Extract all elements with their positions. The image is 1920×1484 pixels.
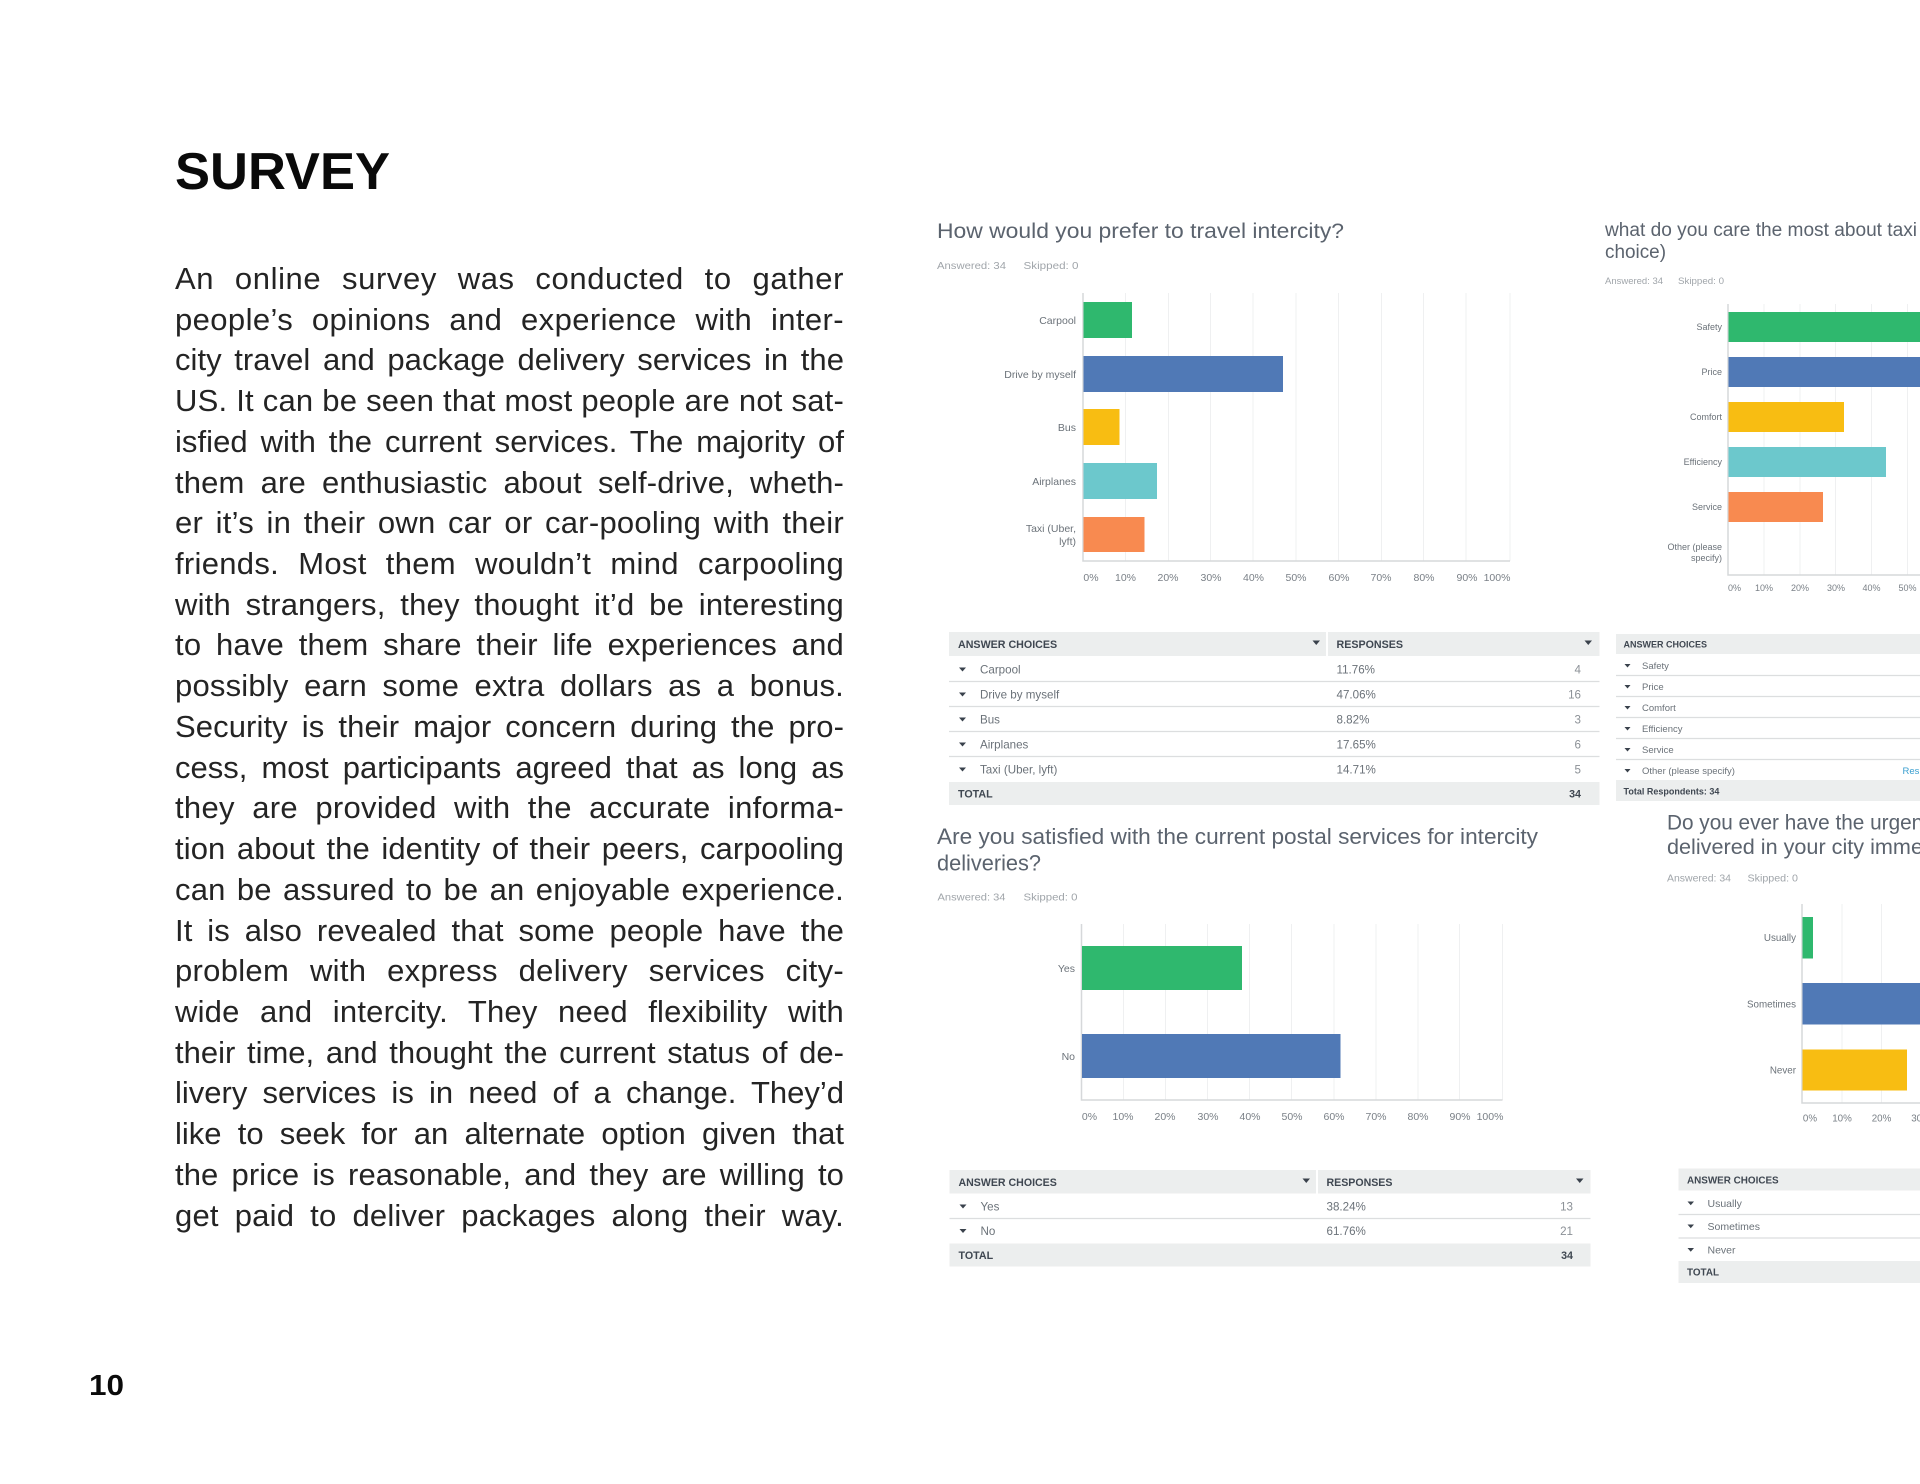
answered and skipped counts bbox=[937, 260, 1079, 272]
table: delivery urgency responses: Never bbox=[1708, 1244, 1736, 1256]
bar chart: postal satisfaction: 60% bbox=[1323, 1111, 1345, 1123]
bar chart: travel preference: 0% bbox=[1083, 572, 1099, 584]
bar chart: taxi priorities: 40% bbox=[1862, 583, 1881, 593]
panel: postal satisfaction survey question bbox=[937, 824, 1590, 1266]
bar chart: postal satisfaction: 0% bbox=[1082, 1111, 1097, 1123]
answered and skipped counts: Skipped: 0 bbox=[1748, 872, 1798, 884]
page number: 10 bbox=[89, 1370, 124, 1402]
table: travel preference responses: 3 bbox=[1575, 714, 1581, 726]
table: travel preference responses: 14.71% bbox=[1336, 764, 1376, 776]
text block: survey summary: to have them share their life experiences and bbox=[175, 627, 844, 662]
bar chart: postal satisfaction: 20% bbox=[1154, 1111, 1176, 1123]
bar chart: taxi priorities: 50% bbox=[1898, 583, 1917, 593]
table: taxi priorities responses: Comfort bbox=[1642, 703, 1676, 714]
table: postal satisfaction responses: RESPONSES bbox=[1326, 1177, 1392, 1189]
text block: survey summary: the price is reasonable, and they are willing to bbox=[175, 1157, 844, 1192]
table: travel preference responses: Taxi (Uber, lyft) bbox=[980, 764, 1057, 776]
bar chart: postal satisfaction: 10% bbox=[1112, 1111, 1134, 1123]
title: SURVEY bbox=[175, 143, 390, 201]
table: taxi priorities responses: Total Respondents: 34 bbox=[1624, 786, 1719, 796]
bar chart: travel preference: Carpool bbox=[1039, 315, 1076, 327]
answered and skipped counts: Answered: 34 bbox=[1605, 276, 1663, 287]
table: delivery urgency responses bbox=[1678, 1168, 1920, 1283]
table: postal satisfaction responses: Yes bbox=[980, 1200, 1000, 1214]
bar chart: travel preference: 60% bbox=[1328, 572, 1350, 584]
text block: survey summary: er it’s in their own car or car-pooling with their bbox=[175, 505, 844, 540]
text block: survey summary: like to seek for an alternate option given that bbox=[175, 1116, 844, 1151]
bar chart: delivery urgency: 0% bbox=[1803, 1114, 1817, 1124]
table: travel preference responses: 5 bbox=[1575, 764, 1581, 776]
bar chart: travel preference: 50% bbox=[1285, 572, 1307, 584]
table: postal satisfaction responses: ANSWER CHOICES bbox=[958, 1177, 1057, 1189]
table: travel preference responses: 8.82% bbox=[1336, 714, 1369, 726]
bar chart: postal satisfaction bbox=[1058, 924, 1503, 1123]
bar chart: travel preference: lyft) bbox=[1059, 536, 1076, 548]
bar chart: postal satisfaction: 50% bbox=[1281, 1111, 1303, 1123]
table: travel preference responses: Airplanes bbox=[980, 738, 1029, 752]
table: travel preference responses: Drive by myself bbox=[980, 688, 1060, 702]
table: taxi priorities responses: Price bbox=[1642, 682, 1664, 693]
bar chart: travel preference: 40% bbox=[1243, 572, 1264, 584]
table: travel preference responses: Carpool bbox=[980, 664, 1021, 676]
table: postal satisfaction responses: 61.76% bbox=[1326, 1225, 1366, 1238]
table: travel preference responses: 47.06% bbox=[1336, 688, 1376, 702]
text block: survey summary: Security is their major concern during the pro- bbox=[175, 709, 844, 744]
table: postal satisfaction responses: 34 bbox=[1561, 1250, 1573, 1262]
text block: survey summary: It is also revealed that some people have the bbox=[175, 912, 844, 948]
answered and skipped counts: Answered: 34 bbox=[1667, 872, 1731, 884]
text block: survey summary: with strangers, they thought it’d be interesting bbox=[175, 587, 844, 622]
table: travel preference responses bbox=[949, 632, 1600, 805]
panel: travel preference survey question bbox=[937, 220, 1600, 805]
table: taxi priorities responses: Service bbox=[1642, 745, 1674, 756]
text block: survey summary: An online survey was conducted to gather bbox=[175, 261, 844, 296]
bar chart: taxi priorities: 20% bbox=[1791, 583, 1809, 593]
text block: survey summary: wide and intercity. They need flexibility with bbox=[175, 994, 844, 1029]
bar chart: delivery urgency bbox=[1747, 904, 1920, 1124]
bar chart: travel preference: Airplanes bbox=[1032, 476, 1076, 488]
bar chart: delivery urgency: Usually bbox=[1764, 933, 1796, 944]
text block: survey summary: US. It can be seen that most people are not sat- bbox=[175, 383, 844, 418]
table: travel preference responses: 16 bbox=[1568, 688, 1581, 702]
table: delivery urgency responses: Usually bbox=[1708, 1198, 1743, 1210]
bar chart: taxi priorities: Comfort bbox=[1690, 412, 1722, 422]
bar chart: travel preference: 70% bbox=[1370, 572, 1392, 584]
text block: survey summary: can be assured to be an enjoyable experience. bbox=[175, 872, 844, 907]
bar chart: taxi priorities: 10% bbox=[1755, 583, 1773, 593]
heading: postal question: Are you satisfied with the current postal services for intercity bbox=[937, 824, 1538, 849]
table: postal satisfaction responses: 38.24% bbox=[1326, 1200, 1366, 1214]
bar chart: taxi priorities: 0% bbox=[1728, 583, 1741, 593]
text block: survey summary: tion about the identity of their peers, carpooling bbox=[175, 831, 844, 866]
text block: survey summary: possibly earn some extra dollars as a bonus. bbox=[175, 668, 844, 703]
bar chart: postal satisfaction: 30% bbox=[1197, 1111, 1219, 1123]
table: postal satisfaction responses bbox=[950, 1170, 1590, 1266]
bar chart: travel preference: Bus bbox=[1058, 422, 1076, 434]
bar chart: taxi priorities: Safety bbox=[1696, 322, 1722, 332]
table: delivery urgency responses: Sometimes bbox=[1708, 1221, 1760, 1233]
bar chart: travel preference: 30% bbox=[1200, 572, 1222, 584]
table: travel preference responses: TOTAL bbox=[958, 788, 993, 800]
bar chart: delivery urgency: Never bbox=[1770, 1066, 1797, 1076]
text block: survey summary: get paid to deliver packages along their way. bbox=[175, 1198, 844, 1233]
answered and skipped counts bbox=[938, 892, 1078, 904]
bar chart: taxi priorities: Other (please bbox=[1667, 542, 1722, 552]
bar chart: travel preference: Taxi (Uber, bbox=[1026, 523, 1076, 535]
bar chart: postal satisfaction: 90% bbox=[1449, 1111, 1471, 1123]
bar chart: postal satisfaction: 100% bbox=[1477, 1111, 1503, 1123]
bar chart: travel preference: 20% bbox=[1157, 572, 1179, 584]
text block: survey summary: people’s opinions and experience with inter- bbox=[175, 302, 844, 337]
bar chart: delivery urgency: 20% bbox=[1872, 1114, 1892, 1124]
table: delivery urgency responses: TOTAL bbox=[1687, 1268, 1719, 1278]
bar chart: taxi priorities: specify) bbox=[1691, 553, 1722, 563]
table: taxi priorities responses bbox=[1616, 634, 1920, 801]
text block: survey summary: isfied with the current services. The majority of bbox=[175, 424, 844, 459]
heading: taxi question: what do you care the most about taxi bbox=[1604, 220, 1917, 241]
answered and skipped counts: Answered: 34 bbox=[937, 260, 1006, 272]
heading: travel question: How would you prefer to travel intercity? bbox=[937, 220, 1344, 243]
table: travel preference responses: Bus bbox=[980, 714, 1000, 726]
text block: survey summary: they are provided with the accurate informa- bbox=[175, 790, 844, 825]
answered and skipped counts bbox=[1605, 276, 1724, 287]
text block: survey summary: cess, most participants agreed that as long as bbox=[175, 750, 844, 785]
bar chart: delivery urgency: Sometimes bbox=[1747, 1000, 1796, 1010]
bar chart: travel preference bbox=[1004, 293, 1510, 584]
text block: survey summary bbox=[175, 261, 844, 1233]
heading: delivery question second line: delivered in your city immed bbox=[1667, 836, 1920, 859]
bar chart: taxi priorities: Service bbox=[1692, 502, 1722, 512]
table: travel preference responses: 34 bbox=[1569, 788, 1581, 800]
bar chart: delivery urgency: 10% bbox=[1832, 1114, 1852, 1124]
table: travel preference responses: 6 bbox=[1575, 738, 1581, 752]
bar chart: taxi priorities: 30% bbox=[1827, 583, 1845, 593]
bar chart: postal satisfaction: 40% bbox=[1239, 1111, 1261, 1123]
heading: postal question second line: deliveries? bbox=[937, 850, 1041, 876]
panel: taxi priorities survey question bbox=[1604, 220, 1920, 801]
text block: survey summary: livery services is in need of a change. They’d bbox=[175, 1075, 844, 1110]
table: travel preference responses: 17.65% bbox=[1336, 738, 1376, 752]
bar chart: postal satisfaction: Yes bbox=[1058, 963, 1075, 975]
bar chart: postal satisfaction: 70% bbox=[1365, 1111, 1387, 1123]
table: delivery urgency responses: ANSWER CHOICES bbox=[1687, 1176, 1779, 1186]
table: travel preference responses: RESPONSES bbox=[1336, 639, 1403, 651]
bar chart: postal satisfaction: 80% bbox=[1407, 1111, 1429, 1123]
bar chart: travel preference: 10% bbox=[1115, 572, 1136, 584]
answered and skipped counts: Skipped: 0 bbox=[1024, 892, 1078, 904]
bar chart: travel preference: 90% bbox=[1456, 572, 1478, 584]
table: postal satisfaction responses: No bbox=[980, 1225, 995, 1238]
text block: survey summary: city travel and package delivery services in the bbox=[175, 342, 844, 377]
bar chart: taxi priorities: Price bbox=[1701, 367, 1722, 377]
table: postal satisfaction responses: 13 bbox=[1560, 1200, 1573, 1214]
table: taxi priorities responses: Efficiency bbox=[1642, 724, 1683, 735]
table: taxi priorities responses: ANSWER CHOICES bbox=[1624, 640, 1707, 650]
answered and skipped counts: Answered: 34 bbox=[938, 892, 1006, 904]
text block: survey summary: problem with express delivery services city- bbox=[175, 953, 844, 988]
table: taxi priorities responses: Safety bbox=[1642, 661, 1669, 672]
bar chart: travel preference: 100% bbox=[1484, 572, 1510, 584]
table: postal satisfaction responses: 21 bbox=[1560, 1225, 1573, 1238]
answered and skipped counts: Skipped: 0 bbox=[1024, 260, 1079, 272]
bar chart: taxi priorities bbox=[1667, 304, 1920, 593]
table: travel preference responses: 11.76% bbox=[1336, 664, 1375, 676]
panel: urgent city delivery survey question bbox=[1667, 812, 1920, 1283]
heading: taxi question second line: choice) bbox=[1605, 242, 1666, 263]
answered and skipped counts bbox=[1667, 872, 1798, 884]
bar chart: taxi priorities: Efficiency bbox=[1684, 457, 1722, 467]
table: taxi priorities responses: Other (please specify) bbox=[1642, 766, 1735, 777]
bar chart: postal satisfaction: No bbox=[1062, 1051, 1075, 1063]
table: travel preference responses: ANSWER CHOICES bbox=[958, 639, 1057, 651]
text block: survey summary: friends. Most them wouldn’t mind carpooling bbox=[175, 546, 844, 581]
answered and skipped counts: Skipped: 0 bbox=[1678, 276, 1724, 287]
bar chart: travel preference: Drive by myself bbox=[1004, 369, 1076, 381]
text block: survey summary: their time, and thought the current status of de- bbox=[175, 1035, 844, 1070]
table: postal satisfaction responses: TOTAL bbox=[958, 1250, 994, 1262]
bar chart: travel preference: 80% bbox=[1413, 572, 1435, 584]
text block: survey summary: them are enthusiastic about self-drive, wheth- bbox=[175, 465, 844, 500]
table: travel preference responses: 4 bbox=[1575, 664, 1582, 676]
